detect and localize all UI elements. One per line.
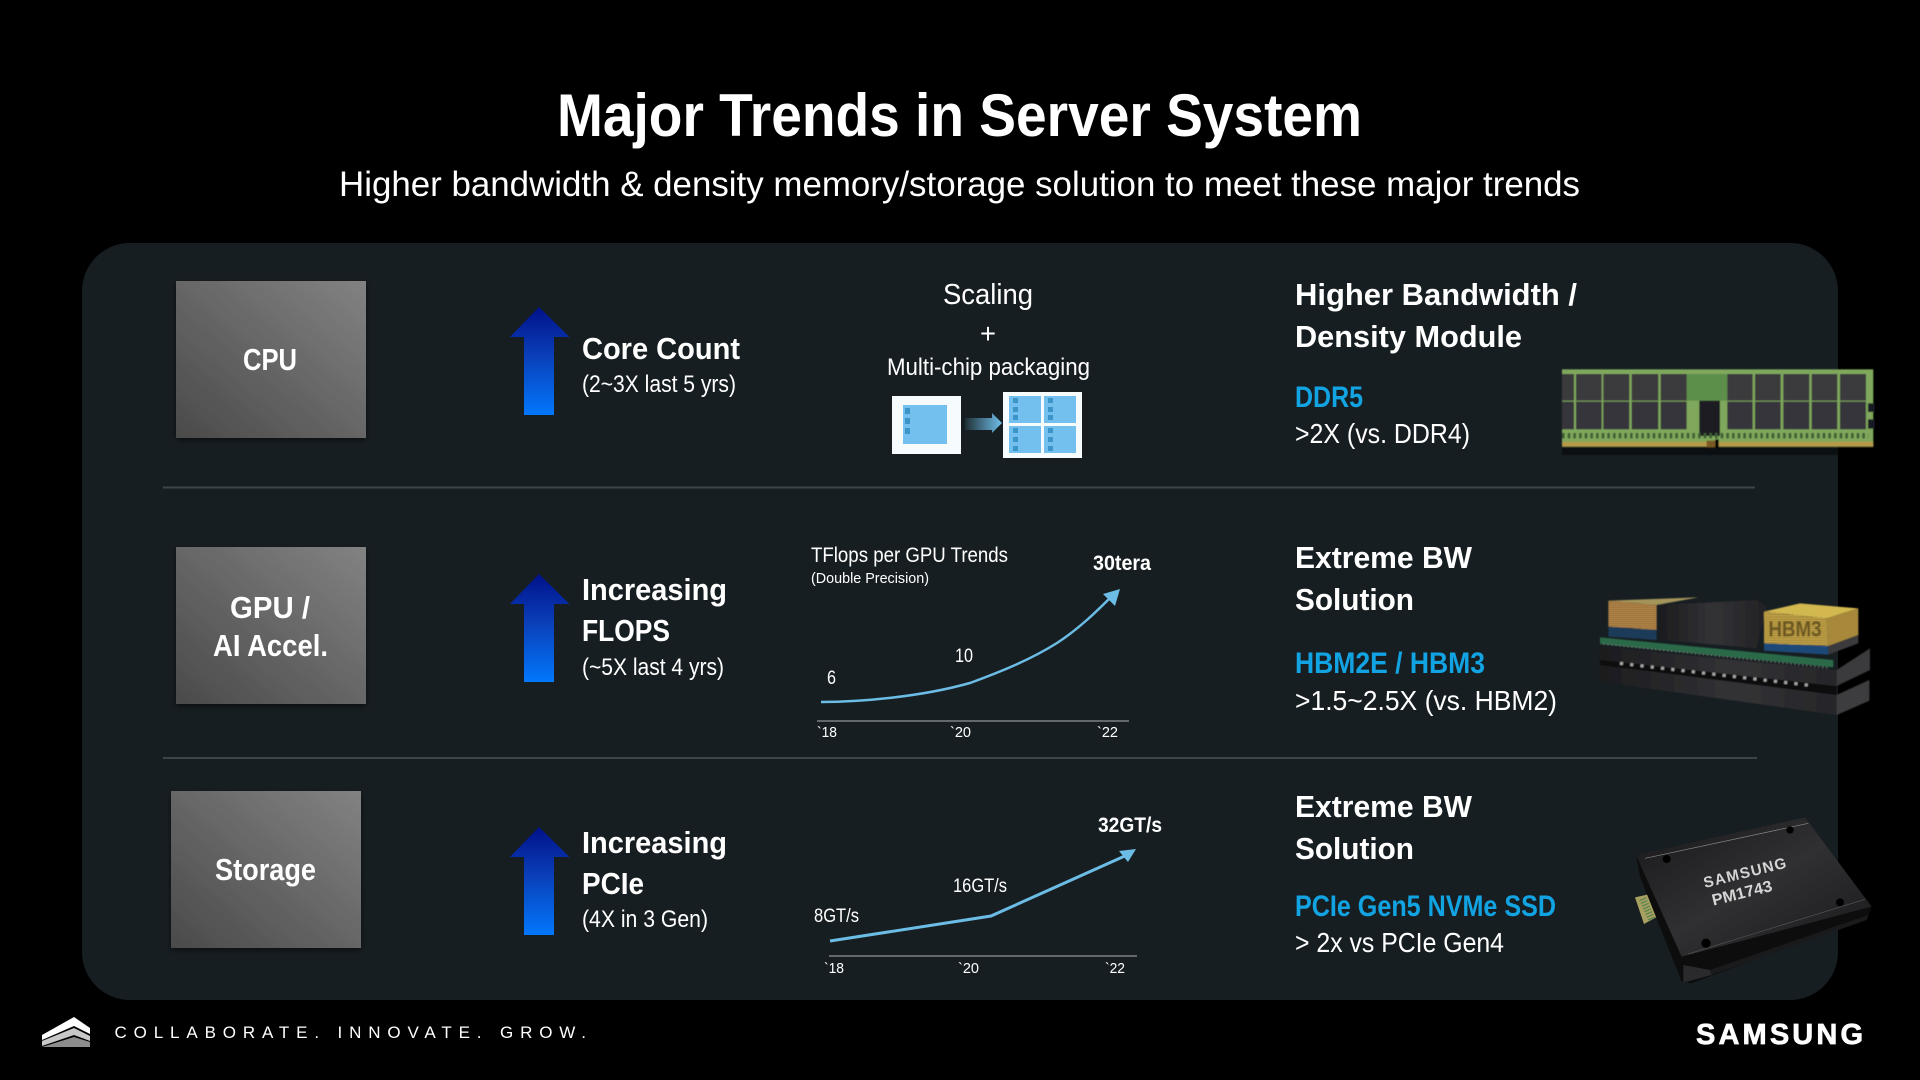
line chart: TFlops per GPU: 30tera	[1093, 552, 1151, 575]
image: HBM stack	[1600, 597, 1870, 715]
line chart: PCIe speed: 32GT/s	[1098, 814, 1162, 837]
panel: GPU row	[176, 540, 1870, 741]
line chart: TFlops per GPU: `20	[950, 724, 971, 741]
image: HBM stack: HBM3	[1768, 617, 1822, 642]
text: increasing PCIe: PCIe	[582, 866, 644, 901]
text: extreme BW SSD: PCIe Gen5 NVMe SSD	[1295, 890, 1556, 923]
chip box: GPU / AI Accel.	[176, 547, 366, 704]
text: extreme BW SSD: Extreme BW	[1295, 789, 1473, 824]
text: increasing PCIe	[582, 825, 727, 933]
chip box: CPU: CPU	[243, 342, 297, 377]
text: increasing PCIe: Increasing	[582, 825, 727, 860]
chip box: Storage	[171, 791, 361, 948]
text: extreme BW HBM: HBM2E / HBM3	[1295, 647, 1485, 680]
chip box: GPU / AI Accel.: AI Accel.	[213, 628, 328, 663]
text: scaling and multi-chip packaging: Multi-chip packaging	[887, 354, 1090, 381]
text: extreme BW HBM	[1295, 540, 1557, 716]
image: PM1743 SSD: SAMSUNG	[1702, 855, 1789, 892]
text: scaling and multi-chip packaging	[887, 279, 1090, 381]
line chart: PCIe speed: `20	[958, 960, 979, 977]
arrow: FLOPS up	[510, 574, 570, 682]
footer tagline: COLLABORATE. INNOVATE. GROW.	[114, 1023, 586, 1042]
subtitle: Higher bandwidth & density memory/storage solution to meet these major trends	[339, 165, 1580, 204]
text: higher bandwidth module: >2X (vs. DDR4)	[1295, 418, 1470, 449]
line chart: PCIe speed	[814, 814, 1162, 977]
line chart: TFlops per GPU	[811, 544, 1151, 741]
icon: single chip to multi-chip package	[892, 392, 1082, 458]
line chart: TFlops per GPU: 10	[955, 646, 973, 667]
line chart: TFlops per GPU: TFlops per GPU Trends	[811, 544, 1008, 567]
text: increasing FLOPS: (~5X last 4 yrs)	[582, 654, 724, 681]
line chart: PCIe speed: `22	[1105, 960, 1125, 977]
text: extreme BW HBM: >1.5~2.5X (vs. HBM2)	[1295, 685, 1557, 716]
text: extreme BW SSD	[1295, 789, 1556, 958]
text: extreme BW SSD: Solution	[1295, 831, 1414, 866]
text: increasing FLOPS: FLOPS	[582, 613, 670, 648]
text: extreme BW HBM: Solution	[1295, 582, 1414, 617]
text: scaling and multi-chip packaging: +	[980, 318, 996, 349]
panel: main content	[82, 243, 1838, 1000]
arrow: core count up	[510, 307, 570, 415]
panel: Storage row	[171, 789, 1872, 983]
line chart: PCIe speed: 8GT/s	[814, 906, 859, 927]
text: core count: Core Count	[582, 331, 740, 366]
text: higher bandwidth module: Higher Bandwidth /	[1295, 277, 1577, 312]
text: increasing PCIe: (4X in 3 Gen)	[582, 906, 708, 933]
logo: Samsung wordmark: SAMSUNG	[1696, 1019, 1863, 1051]
icon: stacked layers logo	[42, 1017, 90, 1047]
text: core count	[582, 331, 740, 398]
text: extreme BW HBM: Extreme BW	[1295, 540, 1473, 575]
text: extreme BW SSD: > 2x vs PCIe Gen4	[1295, 927, 1504, 958]
panel: CPU row	[176, 277, 1875, 458]
chip box: CPU	[176, 281, 366, 438]
text: higher bandwidth module: DDR5	[1295, 381, 1363, 414]
text: core count: (2~3X last 5 yrs)	[582, 371, 736, 398]
chip box: GPU / AI Accel.: GPU /	[230, 590, 310, 625]
text: higher bandwidth module: Density Module	[1295, 319, 1522, 354]
image: PM1743 SSD: PM1743	[1710, 878, 1774, 910]
image: PM1743 SSD	[1635, 817, 1872, 983]
text: higher bandwidth module	[1295, 277, 1577, 449]
line chart: PCIe speed: 16GT/s	[953, 876, 1007, 897]
text: increasing FLOPS: Increasing	[582, 572, 727, 607]
image: DDR5 memory module	[1562, 369, 1875, 455]
line chart: TFlops per GPU: `22	[1097, 724, 1118, 741]
line chart: PCIe speed: `18	[824, 960, 844, 977]
arrow: PCIe up	[510, 827, 570, 935]
title: Major Trends in Server System	[557, 82, 1362, 149]
line chart: TFlops per GPU: `18	[817, 724, 837, 741]
text: increasing FLOPS	[582, 572, 727, 681]
line chart: TFlops per GPU: 6	[827, 668, 836, 689]
chip box: Storage: Storage	[215, 852, 316, 887]
text: scaling and multi-chip packaging: Scaling	[943, 279, 1033, 311]
line chart: TFlops per GPU: (Double Precision)	[811, 570, 929, 587]
